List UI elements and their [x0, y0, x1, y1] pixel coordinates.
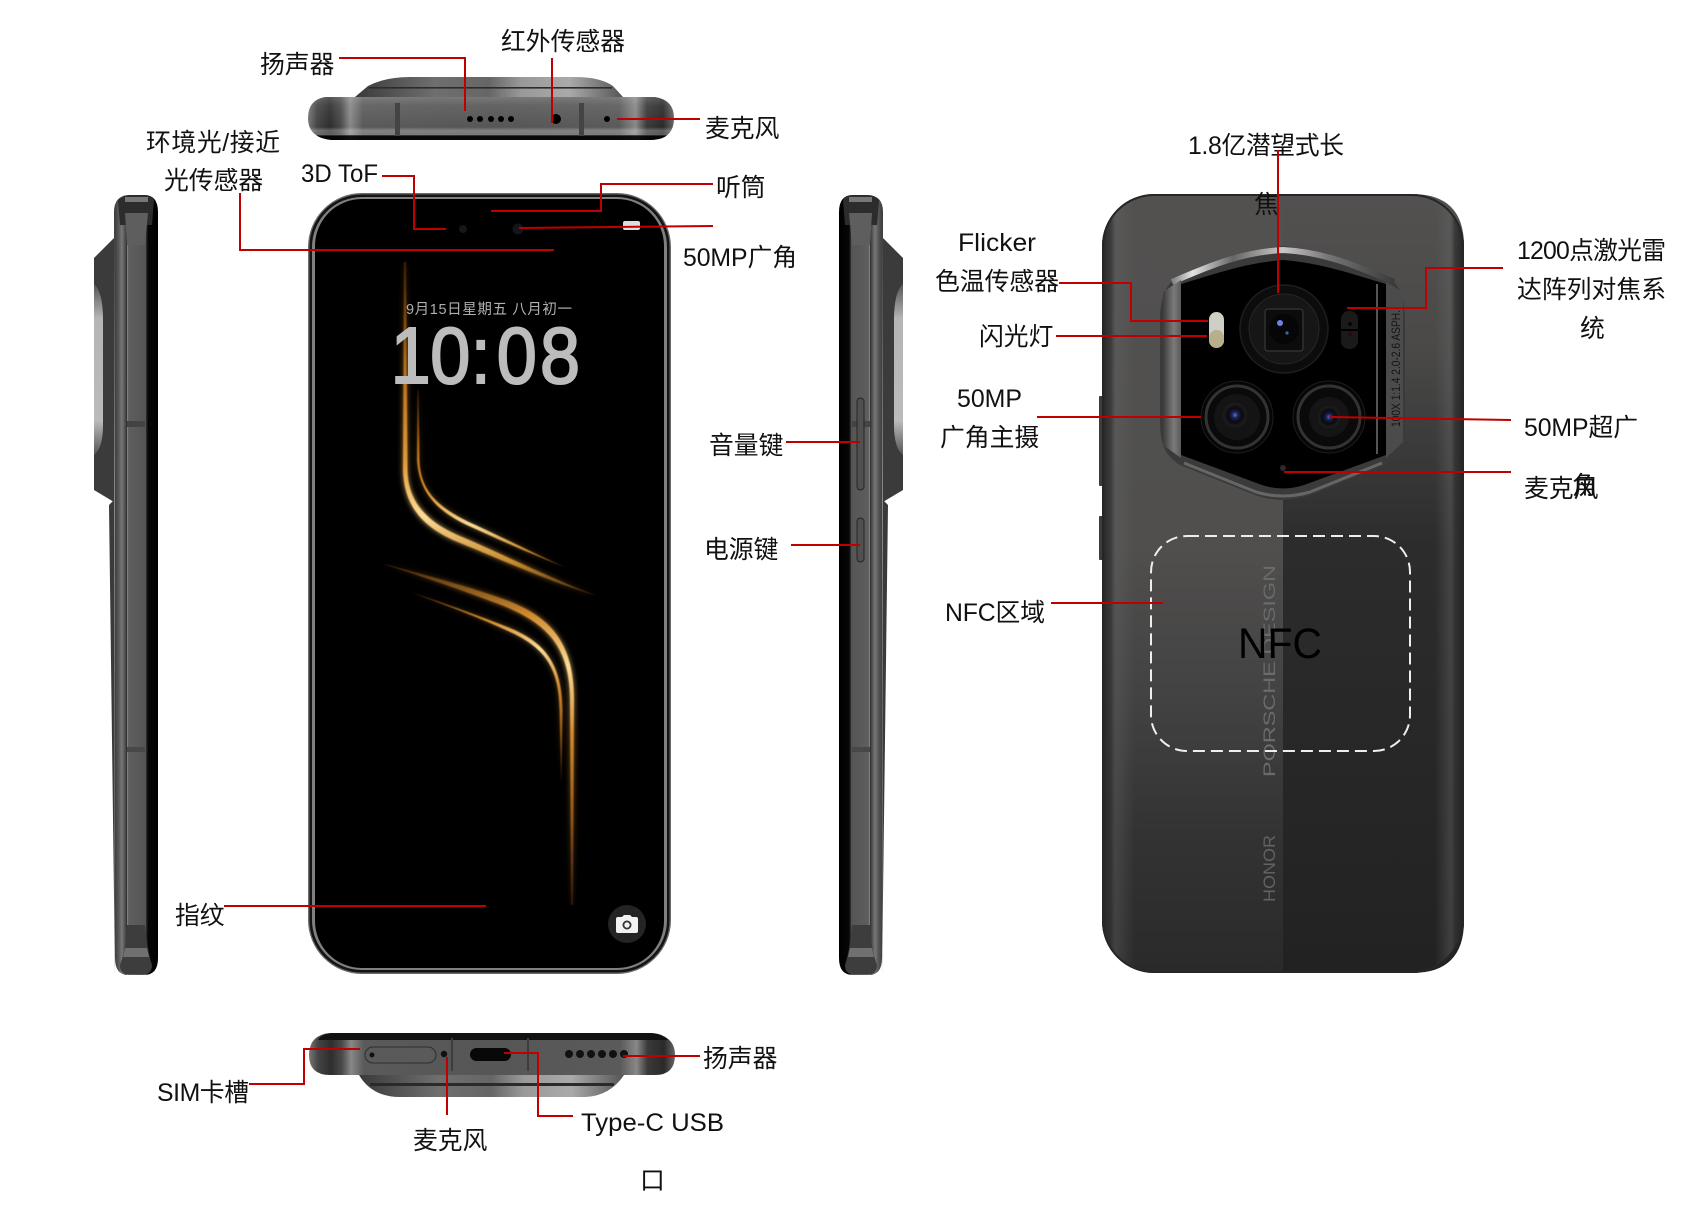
callout: 50MP ultrawide: [1329, 414, 1638, 500]
callout: Type-C USB port: 口: [640, 1168, 665, 1195]
callout: SIM tray: SIM卡槽: [157, 1079, 249, 1107]
callout: 50MP main camera: 广角主摄: [940, 424, 1039, 452]
callout: periscope telephoto: 焦: [1254, 191, 1279, 219]
callout: laser focus: 1200点激光雷: [1517, 237, 1666, 265]
callout: periscope telephoto: 1.8亿潜望式长: [1188, 132, 1344, 160]
callout: 50MP ultrawide: 角: [1572, 472, 1597, 500]
phone: right side view: [839, 195, 903, 975]
volume key: [857, 398, 864, 490]
callout: bottom microphone: [413, 1057, 488, 1155]
callout: Flicker sensor: [935, 230, 1208, 321]
callout: laser focus: 达阵列对焦系: [1517, 276, 1666, 304]
callout: Type-C USB port: Type-C USB: [581, 1110, 724, 1137]
callout: infrared sensor: 红外传感器: [501, 28, 625, 56]
callout: top speaker: [260, 51, 465, 111]
rear microphone hole: [1280, 465, 1286, 471]
brand text PORSCHE DESIGN: PORSCHE DESIGN: [1261, 565, 1279, 777]
callout: power key: 电源键: [704, 536, 778, 564]
brand text HONOR: HONOR: [1261, 835, 1279, 902]
wallpaper light curves: [380, 262, 597, 905]
laser focus module: [1341, 311, 1358, 349]
periscope telephoto lens: [1240, 285, 1328, 373]
callout: volume key: 音量键: [709, 432, 783, 460]
callout: 50MP wide front camera: 50MP广角: [683, 244, 797, 272]
SIM tray: [365, 1047, 436, 1063]
phone: top edge view: [308, 77, 674, 140]
callout: infrared sensor: [501, 28, 625, 123]
callout: Flicker sensor: 色温传感器: [935, 268, 1059, 296]
callout: earpiece: [491, 174, 766, 211]
bottom microphone hole: [441, 1051, 447, 1057]
callout: SIM tray: [157, 1049, 360, 1107]
callout: earpiece: 听筒: [716, 174, 766, 202]
callout: 50MP ultrawide: 50MP超广: [1524, 414, 1638, 442]
NFC dashed zone: [1151, 536, 1410, 751]
lock screen time: 10:08: [391, 312, 580, 401]
top speaker holes: [467, 116, 514, 122]
callout: bottom microphone: 麦克风: [413, 1127, 488, 1155]
callout: 3D ToF: [301, 161, 446, 229]
USB-C port: [470, 1048, 511, 1061]
callout: top microphone: 麦克风: [705, 115, 780, 143]
callout: laser focus: 统: [1580, 315, 1605, 343]
phone: back view: [1099, 194, 1464, 973]
callout: 50MP main camera: 50MP: [957, 386, 1022, 413]
callout: 50MP main camera: [940, 386, 1201, 452]
callout: laser focus: [1347, 237, 1666, 343]
NFC text: NFC: [1238, 620, 1322, 668]
callout: 3D ToF: 3D ToF: [301, 161, 378, 188]
phone: bottom edge view: [309, 1033, 675, 1097]
flash: [1209, 312, 1224, 348]
top microphone hole: [604, 116, 610, 122]
callout: ambient and proximity sensor: [146, 129, 554, 250]
callout: periscope telephoto: [1188, 132, 1344, 293]
main camera lens: [1201, 381, 1273, 453]
ultrawide camera lens: [1293, 381, 1365, 453]
lens engraving: 100X 1:1.4 2.0-2.6 ASPH.: [1391, 310, 1403, 427]
callout: flash: 闪光灯: [979, 323, 1053, 351]
lock screen date: 9月15日星期五 八月初一: [406, 301, 572, 318]
callout: ambient and proximity sensor: 环境光/接近: [146, 129, 280, 157]
phone: left side view: [94, 195, 158, 975]
callout: top speaker: 扬声器: [260, 51, 335, 79]
power key: [857, 518, 864, 562]
status indicator: [623, 221, 640, 230]
front lens 50MP: [512, 224, 524, 234]
callout: Flicker sensor: Flicker: [958, 230, 1036, 257]
callout: fingerprint: 指纹: [175, 902, 225, 930]
callout: ambient and proximity sensor: 光传感器: [164, 167, 263, 195]
callout: bottom speaker: 扬声器: [703, 1045, 778, 1073]
front lens 3D ToF: [459, 225, 467, 233]
camera shortcut icon: [608, 905, 646, 943]
bottom speaker holes: [565, 1050, 628, 1058]
callout: NFC zone: NFC区域: [945, 599, 1045, 627]
callout: Type-C USB port: [504, 1053, 724, 1195]
callout: rear microphone: 麦克风: [1524, 475, 1599, 503]
infrared sensor: [551, 114, 561, 124]
camera island: [1160, 246, 1405, 500]
phone: front view: [308, 193, 671, 974]
